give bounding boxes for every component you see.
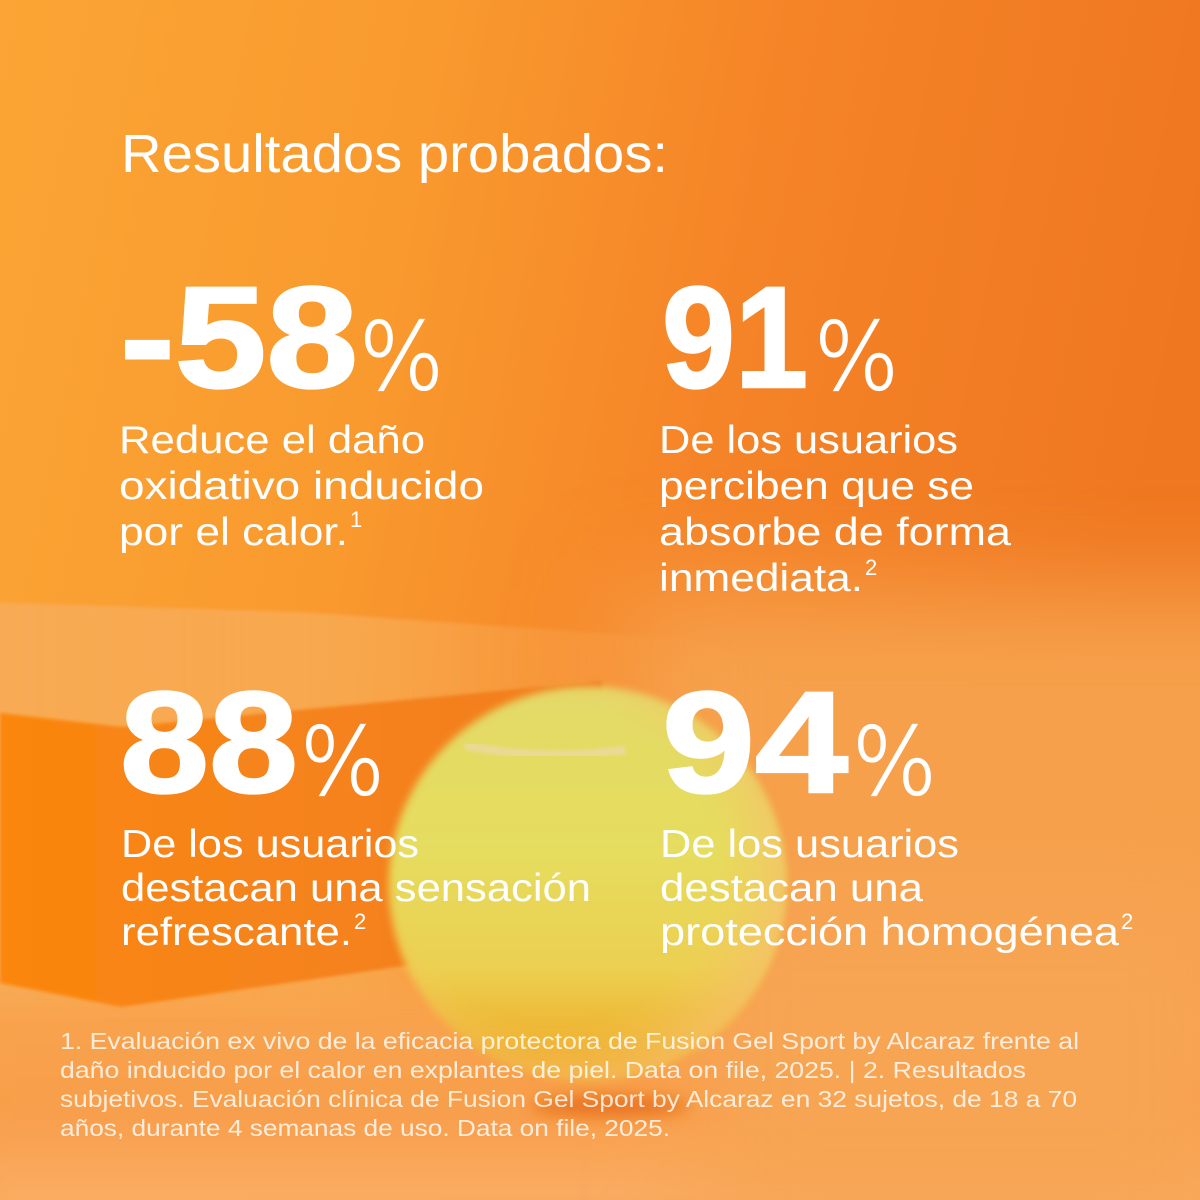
- tennis ball: [389, 687, 785, 1115]
- stat: 88%: refrescante.: [121, 911, 352, 954]
- stat: -58%: oxidativo inducido: [119, 465, 484, 508]
- stat: 94%: 94: [662, 662, 848, 823]
- description: absorption: De los usuarios: [659, 419, 958, 462]
- stat: 91%: perciben que se: [659, 465, 974, 508]
- stat: -58%: por el calor.: [119, 511, 348, 554]
- stat: 91%: %: [814, 303, 899, 412]
- stat: 91%: inmediata.: [659, 557, 863, 600]
- stat: 94%: protección homogénea: [660, 911, 1119, 954]
- stat: 91%: [659, 257, 1011, 600]
- stat: 94%: 2: [1121, 909, 1133, 934]
- stat: 94%: [660, 662, 1133, 954]
- title: Resultados probados:: [121, 124, 668, 184]
- footnotes: daño inducido por el calor en explantes de piel. Data on file, 2025. | 2. Resultados: [60, 1057, 1026, 1083]
- footnotes: años, durante 4 semanas de uso. Data on file, 2025.: [60, 1115, 670, 1141]
- stat: 88%: destacan una sensación: [121, 867, 591, 910]
- stat: 94%: %: [852, 708, 937, 817]
- stat: 94%: destacan una: [660, 867, 923, 910]
- description: cooling: De los usuarios: [121, 823, 419, 866]
- stat: 91%: absorbe de forma: [659, 511, 1011, 554]
- footnotes: 1. Evaluación ex vivo de la eficacia protectora de Fusion Gel Sport by Alcaraz frente al: [60, 1028, 1079, 1054]
- footnotes: [60, 1028, 1079, 1141]
- stat: -58%: -58: [120, 257, 358, 418]
- stat: 88%: 88: [120, 662, 298, 823]
- stat: 88%: 2: [354, 909, 366, 934]
- stat: 88%: [120, 662, 591, 954]
- stat: 88%: %: [300, 708, 385, 817]
- stat: -58%: %: [359, 303, 444, 412]
- stat: -58%: 1: [350, 507, 362, 532]
- footnotes: subjetivos. Evaluación clínica de Fusion Gel Sport by Alcaraz en 32 sujetos, de 18 a 70: [60, 1086, 1077, 1112]
- stat: -58%: [119, 257, 484, 554]
- description: oxidative damage: Reduce el daño: [119, 419, 425, 462]
- orange box: [0, 681, 602, 1007]
- stat: 91%: 91: [662, 257, 808, 418]
- description: protection: De los usuarios: [660, 823, 959, 866]
- stat: 91%: 2: [865, 555, 877, 580]
